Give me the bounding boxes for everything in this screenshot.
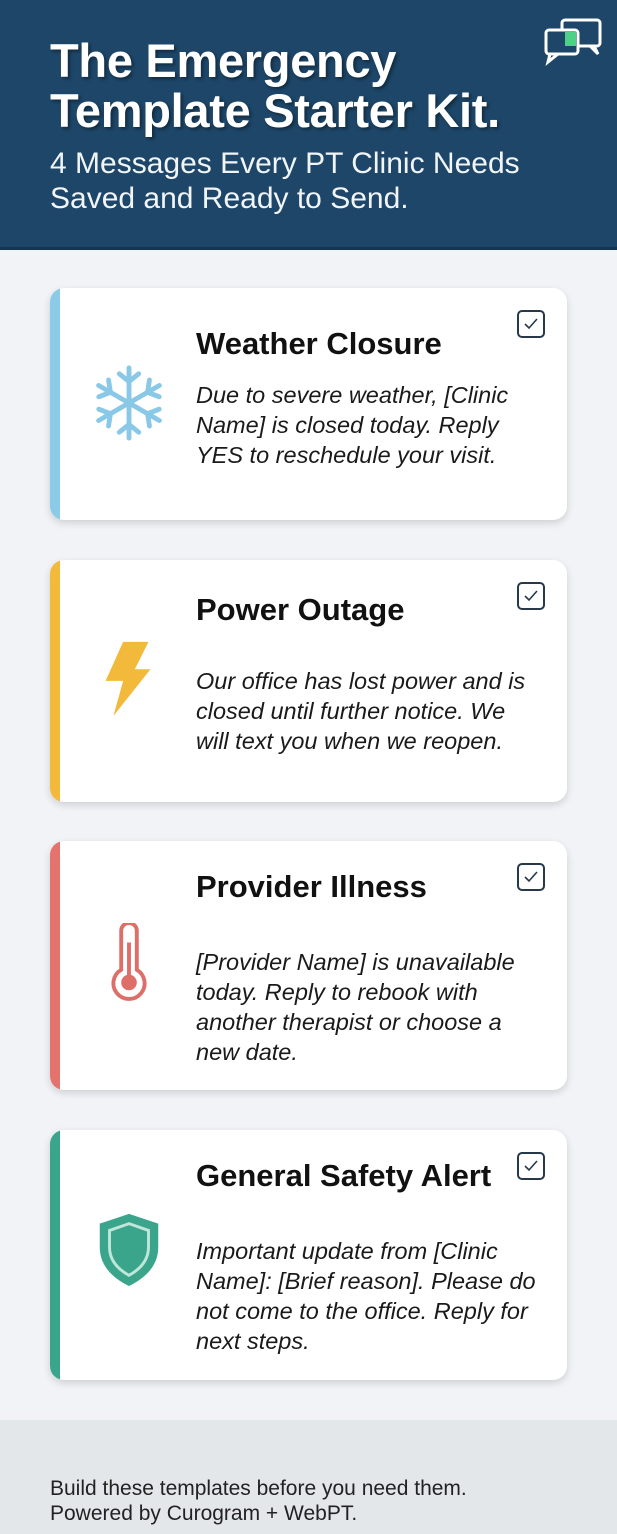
footer text: Powered by Curogram + WebPT. [50,1502,357,1525]
message: Important update from [Clinic Name]: [Brief reason]. Please do not come to the office. Reply for next steps. [196,1238,536,1354]
message: Due to severe weather, [Clinic Name] is closed today. Reply YES to reschedule your visit. [196,382,508,468]
icon: snowflake [96,366,162,440]
title: The Emergency [50,34,396,87]
panel: general safety alert [50,1130,567,1380]
subtitle: 4 Messages Every PT Clinic Needs [50,147,520,180]
heading: Provider Illness [196,869,427,904]
icon: lightning [106,642,150,716]
header [0,0,617,250]
message: Our office has lost power and is closed until further notice. We will text you when we reopen. [196,668,525,754]
title: Template Starter Kit. [50,84,500,137]
footer [0,1420,617,1534]
checkbox [517,863,545,891]
icon: chat bubbles [544,18,602,66]
checkbox [517,310,545,338]
heading: General Safety Alert [196,1158,491,1193]
footer text: Build these templates before you need them. [50,1477,467,1500]
subtitle [50,147,520,215]
subtitle: Saved and Ready to Send. [50,182,409,215]
message: [Provider Name] is unavailable today. Reply to rebook with another therapist or choose a new date. [196,949,515,1065]
icon: shield [100,1214,158,1286]
icon: thermometer [111,923,147,1001]
footer text [50,1477,467,1525]
panel: power outage [50,560,567,802]
heading: Power Outage [196,592,404,627]
title [50,34,500,140]
checkbox [517,1152,545,1180]
heading: Weather Closure [196,326,442,361]
checkbox [517,582,545,610]
panel: provider illness [50,841,567,1090]
panel: weather closure [50,288,567,520]
